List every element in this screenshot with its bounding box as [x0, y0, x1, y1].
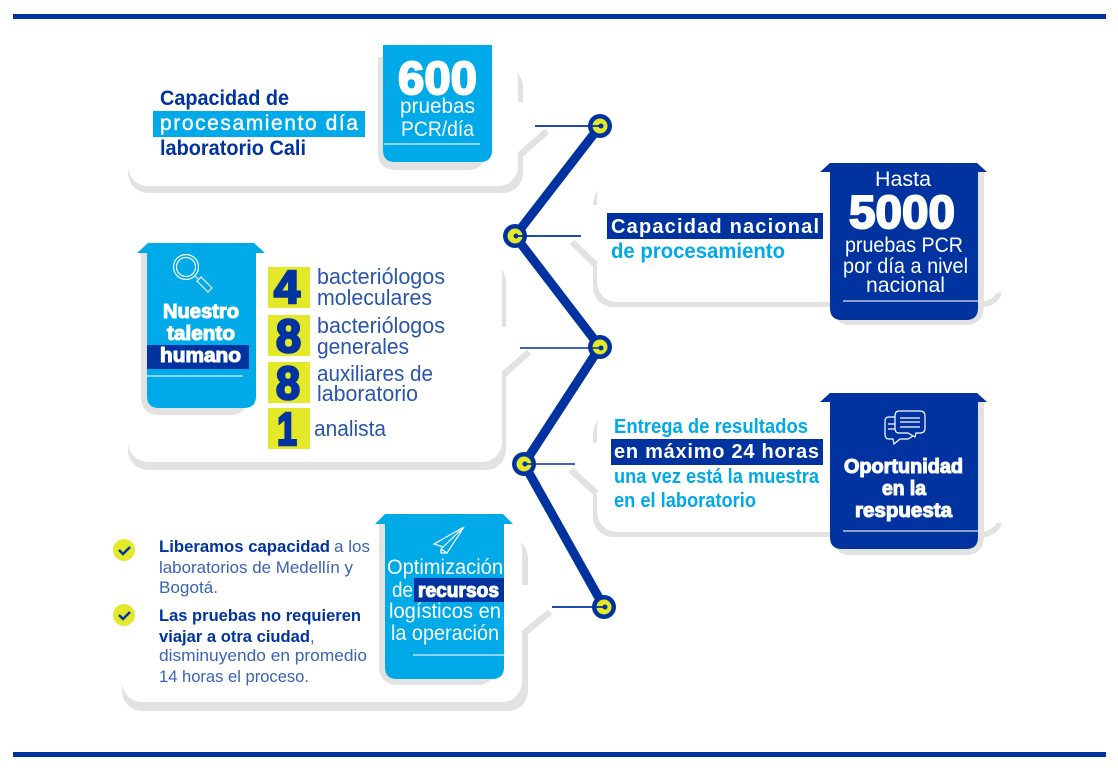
text: entrega de resultados: en el laboratorio — [614, 490, 756, 512]
staff: 8 auxiliares de laboratorio: auxiliares de — [317, 361, 433, 386]
tag: optimización de recursos: la operación — [391, 622, 499, 645]
panel: optimización — [113, 514, 550, 711]
tag: optimización de recursos — [375, 514, 513, 679]
heading: capacidad de procesamiento: procesamiento día — [160, 112, 358, 135]
staff: 8 auxiliares de laboratorio: laboratorio — [317, 381, 418, 406]
tag: hasta 5000 — [820, 163, 987, 320]
heading: capacidad de procesamiento — [153, 87, 365, 160]
staff: 4 bacteriólogos moleculares — [268, 261, 445, 313]
bullet: pruebas no requieren viajar: 14 horas el proceso. — [159, 667, 309, 686]
tag shadow — [141, 253, 250, 415]
tag: optimización de recursos: Optimización — [387, 556, 503, 579]
bullet: liberamos capacidad: laboratorios de Medellín y — [159, 558, 353, 577]
node 3 — [520, 335, 612, 359]
icon: chat bubbles — [885, 411, 925, 444]
tag: nuestro talento humano: humano — [160, 345, 241, 367]
tag: hasta 5000: nacional — [866, 274, 945, 297]
tag: oportunidad en la respuesta — [820, 393, 987, 549]
bottom bar — [13, 752, 1106, 757]
bullet: pruebas no requieren viajar — [113, 604, 367, 686]
tag: oportunidad en la respuesta: respuesta — [855, 500, 953, 522]
bullet: liberamos capacidad — [113, 537, 370, 597]
heading: capacidad nacional: de procesamiento — [611, 240, 785, 263]
node 4 — [512, 452, 575, 476]
tag shadow — [378, 57, 488, 170]
icon: paper plane — [434, 527, 464, 553]
top bar — [13, 14, 1106, 19]
tag shadow — [836, 402, 984, 555]
tag shadow — [379, 524, 498, 685]
node 2 — [503, 224, 581, 248]
tag: 600 pruebas: 600 — [398, 52, 477, 104]
bullet: pruebas no requieren viajar: viajar a otra ciudad — [159, 627, 310, 646]
staff: 1 analista — [268, 403, 387, 455]
staff: 4 bacteriólogos moleculares: bacteriólogos — [317, 264, 445, 289]
icon: check — [113, 604, 135, 626]
staff: 8 bacteriólogos generales: 8 — [276, 310, 301, 362]
text: entrega de resultados: en máximo 24 horas — [614, 441, 819, 463]
tag: hasta 5000: 5000 — [849, 186, 955, 238]
staff: 1 analista: analista — [314, 416, 387, 441]
staff: 4 bacteriólogos moleculares: 4 — [274, 261, 300, 313]
timeline — [503, 114, 616, 619]
tag: optimización de recursos: logísticos en — [389, 600, 501, 623]
heading: capacidad nacional: Capacidad nacional — [611, 216, 819, 238]
node 5 — [552, 595, 616, 619]
staff: 1 analista: 1 — [277, 403, 297, 455]
tag: 600 pruebas: PCR/día — [401, 118, 474, 141]
panel: capacidad nacional — [572, 163, 1007, 325]
staff: 8 auxiliares de laboratorio: 8 — [276, 357, 300, 409]
heading: capacidad de procesamiento: laboratorio Cali — [160, 137, 306, 160]
tag: optimización de recursos: de — [392, 579, 413, 602]
bullet: pruebas no requieren viajar: Las pruebas no requieren — [159, 606, 361, 625]
tag: nuestro talento humano — [137, 243, 265, 408]
tag: oportunidad en la respuesta: en la — [882, 478, 927, 500]
icon: magnifier — [174, 254, 212, 292]
staff: 8 auxiliares de laboratorio — [268, 357, 433, 409]
staff: 4 bacteriólogos moleculares: moleculares — [317, 285, 432, 310]
panel: laboratorio Cali — [128, 45, 547, 193]
node 1 — [535, 114, 612, 138]
text: entrega de resultados: una vez está la muestra — [614, 466, 820, 488]
tag: oportunidad en la respuesta: Oportunidad — [844, 456, 963, 478]
panel: oportunidad — [571, 393, 1007, 555]
tag: hasta 5000: por día a nivel — [843, 255, 968, 278]
text: entrega de resultados: Entrega de resultados — [614, 416, 808, 438]
staff: 8 bacteriólogos generales: bacteriólogos — [317, 313, 445, 338]
bullet: pruebas no requieren viajar: , — [310, 627, 315, 646]
panel: talento humano — [128, 243, 529, 470]
tag: nuestro talento humano: talento — [167, 323, 235, 345]
tag: 600 pruebas: pruebas — [400, 95, 475, 118]
tag: optimización de recursos: recursos — [418, 580, 499, 602]
bullet: pruebas no requieren viajar: disminuyendo en promedio — [159, 646, 367, 665]
text: entrega de resultados — [611, 416, 823, 512]
tag: 600 pruebas — [383, 45, 492, 162]
heading: capacidad nacional — [607, 213, 823, 263]
heading: capacidad de procesamiento: Capacidad de — [160, 87, 289, 110]
tag shadow — [836, 172, 984, 325]
tag: nuestro talento humano: Nuestro — [163, 301, 239, 323]
bullet: liberamos capacidad: Bogotá. — [159, 578, 218, 597]
bullet: liberamos capacidad: a los — [334, 537, 370, 556]
staff: 8 bacteriólogos generales — [268, 310, 445, 362]
tag: hasta 5000: pruebas PCR — [845, 234, 963, 257]
tag: hasta 5000: Hasta — [875, 168, 931, 191]
bullet: liberamos capacidad: Liberamos capacidad — [159, 537, 330, 556]
staff: 8 bacteriólogos generales: generales — [317, 334, 409, 359]
icon: check — [113, 539, 135, 561]
